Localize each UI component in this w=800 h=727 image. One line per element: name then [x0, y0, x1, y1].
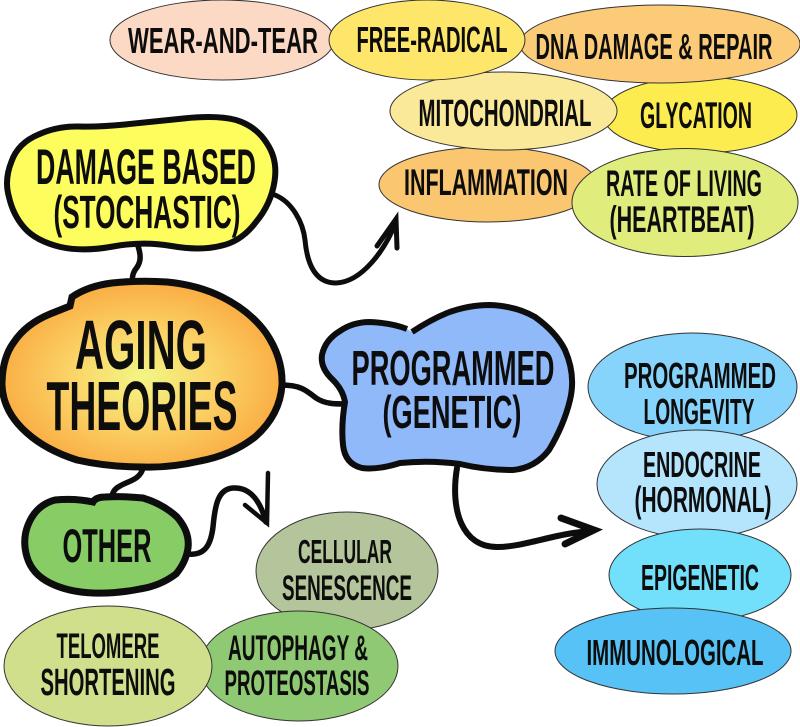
ellipse: autophagy and proteostasis [200, 611, 398, 721]
node: programmed: PROGRAMMED [352, 342, 554, 396]
ellipse: epigenetic [609, 529, 791, 621]
node: aging theories: AGING [75, 306, 207, 384]
ellipse: free-radical [329, 0, 525, 80]
ellipse: autophagy and proteostasis: PROTEOSTASIS [224, 664, 370, 703]
ellipse: cellular senescence: SENESCENCE [282, 569, 412, 608]
connector: aging theories to programmed [281, 385, 346, 404]
node: damage based: (STOCHASTIC) [54, 186, 240, 238]
ellipse: inflammation: INFLAMMATION [404, 162, 568, 203]
ellipse: programmed longevity [588, 333, 797, 441]
ellipse: glycation [603, 77, 797, 153]
ellipse: mitochondrial [390, 72, 617, 150]
connector: damage based to aging theories [132, 246, 140, 284]
node: other: OTHER [62, 519, 152, 572]
node: damage based [7, 117, 275, 249]
ellipse: immunological [555, 608, 791, 694]
ellipse: wear-and-tear: WEAR-AND-TEAR [128, 20, 318, 61]
ellipse: inflammation [379, 147, 597, 222]
ellipse: wear-and-tear [110, 0, 334, 80]
node: programmed: (GENETIC) [382, 386, 522, 438]
node: damage based: DAMAGE BASED [36, 139, 256, 195]
ellipse: endocrine [597, 430, 797, 538]
arrow: damage based to stochastic theories [275, 195, 397, 283]
node: aging theories: THEORIES [46, 367, 238, 445]
ellipse: dna damage and repair [520, 5, 800, 83]
ellipse: free-radical: FREE-RADICAL [356, 19, 508, 60]
ellipse: cellular senescence [256, 512, 438, 630]
node: other [25, 497, 188, 593]
ellipse: autophagy and proteostasis: AUTOPHAGY & [228, 629, 368, 668]
connector: aging theories to other [112, 468, 143, 498]
ellipse: rate of living [572, 148, 798, 256]
ellipse: mitochondrial: MITOCHONDRIAL [418, 93, 592, 135]
ellipse: cellular senescence: CELLULAR [298, 533, 392, 570]
ellipse: telomere shortening [4, 606, 212, 726]
ellipse: telomere shortening: TELOMERE [56, 627, 160, 666]
ellipse: telomere shortening: SHORTENING [40, 662, 176, 704]
node: aging theories [2, 281, 282, 467]
arrow: other to cellular theories [188, 473, 268, 554]
node: programmed [322, 305, 572, 470]
arrow: programmed to genetic theories [455, 468, 594, 547]
